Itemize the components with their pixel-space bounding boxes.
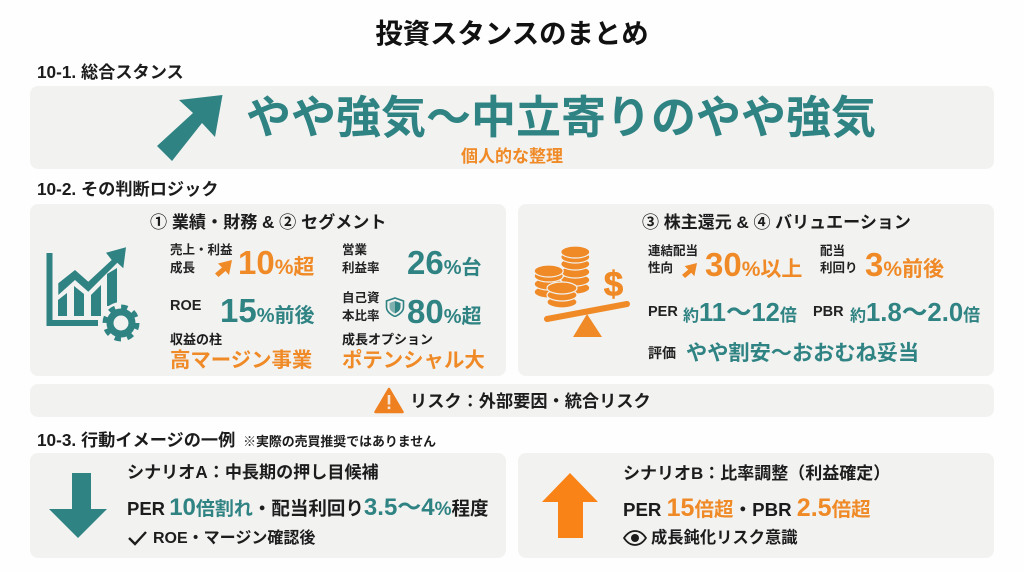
metric: sales and profit growth: 売上・利益 [170, 243, 233, 257]
icon: small up arrow [215, 260, 232, 277]
panel: risk [30, 384, 994, 417]
metric: equity ratio [342, 291, 482, 330]
metric: payout ratio [648, 244, 802, 283]
heading: 10-2 decision logic: 10-2. その判断ロジック [37, 179, 218, 199]
scenario B title: シナリオB：比率調整（利益確定） [623, 464, 890, 483]
icon: small up arrow [682, 263, 697, 278]
metric: PER: 約11〜12倍 [683, 299, 797, 327]
metric: sales and profit growth: 成長 [170, 261, 195, 275]
metric: growth option: 成長オプション [342, 332, 433, 347]
metric: payout ratio: 30%以上 [705, 246, 802, 283]
metric: valuation assessment: やや割安〜おおむね妥当 [686, 342, 919, 365]
metric: payout ratio: 連結配当 [648, 244, 698, 258]
icon: coins on a balance: $ [604, 265, 623, 304]
icon: warning triangle [374, 388, 404, 414]
metric: earnings pillar: 収益の柱 [170, 332, 222, 347]
metric: growth option: ポテンシャル大 [342, 350, 485, 372]
stance note: 個人的な整理 [461, 147, 563, 166]
panel: scenario A [30, 453, 506, 558]
metric: equity ratio: 本比率 [342, 309, 380, 323]
icon: shield [386, 297, 404, 317]
icon: up arrow [542, 473, 598, 538]
heading: 10-1 overall stance: 10-1. 総合スタンス [37, 62, 184, 82]
metric: payout ratio: 性向 [648, 261, 673, 275]
scenario B conditions: PER 15倍超・PBR 2.5倍超 [623, 494, 871, 522]
risk text: リスク：外部要因・統合リスク [410, 391, 651, 411]
metric: dividend yield [820, 244, 944, 283]
icon: down arrow [49, 473, 107, 538]
metric: operating margin [342, 243, 482, 281]
icon: up-right arrow [157, 95, 222, 161]
metric: PBR: PBR [813, 304, 844, 320]
scenario A conditions: PER 10倍割れ・配当利回り3.5〜4%程度 [127, 494, 489, 521]
metric: operating margin: 営業 [342, 243, 367, 257]
scenario A check note: ROE・マージン確認後 [153, 530, 315, 547]
stance headline: やや強気〜中立寄りのやや強気 [246, 92, 876, 143]
panel heading: returns and valuation: ③ 株主還元 & ④ バリュエーション [642, 213, 911, 232]
panel: scenario B [518, 453, 994, 558]
metric: earnings pillar [170, 332, 312, 372]
metric: ROE: ROE [170, 298, 201, 314]
metric: equity ratio: 自己資 [342, 291, 380, 305]
metric: PER: PER [648, 304, 678, 320]
metric: PBR: 約1.8〜2.0倍 [850, 299, 980, 327]
panel: shareholder returns and valuation [518, 204, 994, 376]
metric: growth option [342, 332, 485, 372]
scenario B risk note: 成長鈍化リスク意識 [651, 529, 798, 547]
icon: eye [623, 530, 647, 546]
scenario A title: シナリオA：中長期の押し目候補 [127, 463, 379, 482]
metric: operating margin: 26%台 [407, 244, 482, 281]
metric: ROE [170, 292, 315, 329]
title: 投資スタンスのまとめ [375, 18, 649, 49]
panel: overall stance [30, 86, 994, 169]
icon: coins on a balance [534, 246, 630, 337]
metric: dividend yield: 3%前後 [865, 246, 944, 283]
metric: earnings pillar: 高マージン事業 [170, 350, 312, 372]
panel: results and segments [30, 204, 506, 376]
metric: sales and profit growth [170, 243, 314, 281]
metric: dividend yield: 利回り [820, 261, 858, 275]
metric: valuation assessment: 評価 [648, 345, 676, 361]
panel heading: results and segments: ① 業績・財務 & ② セグメント [150, 213, 386, 232]
metric: dividend yield: 配当 [820, 244, 845, 258]
metric: equity ratio: 80%超 [407, 293, 482, 330]
icon: check mark [128, 531, 147, 546]
metric: operating margin: 利益率 [342, 261, 380, 275]
metric: ROE: 15%前後 [220, 292, 315, 329]
icon: growth chart with gear [46, 247, 140, 342]
metric: sales and profit growth: 10%超 [238, 244, 314, 281]
heading: 10-3 action scenarios: 10-3. 行動イメージの一例 ※実際の売買推奨ではありません [37, 430, 436, 450]
